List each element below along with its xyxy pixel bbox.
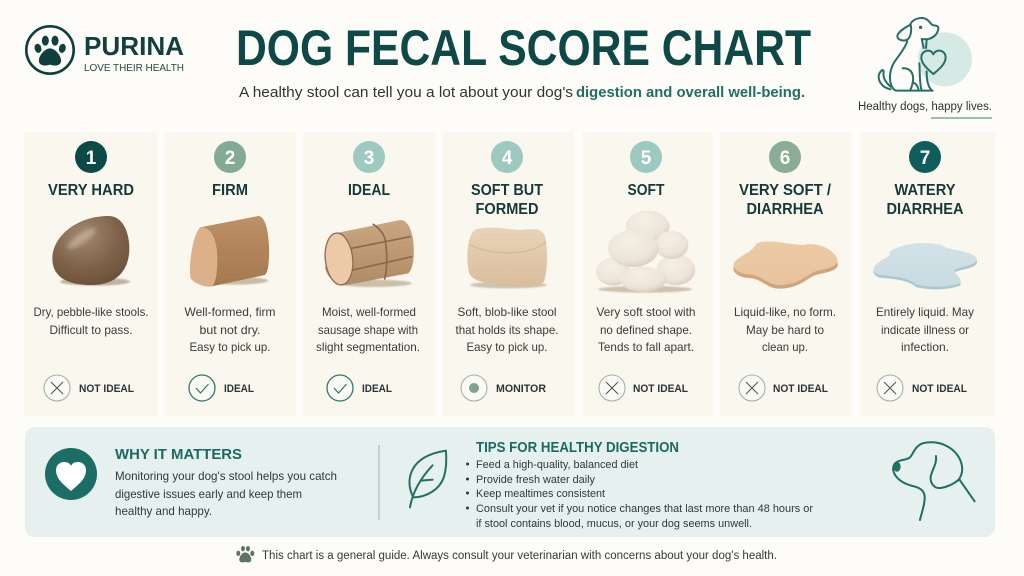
logo: Purina xyxy=(26,26,184,74)
heading: tips: TIPS FOR HEALTHY DIGESTION xyxy=(476,440,679,456)
description xyxy=(456,305,558,354)
panel: score 2 firm xyxy=(164,132,296,416)
stool: water puddle xyxy=(874,243,977,289)
description: Well-formed, firm xyxy=(184,305,276,319)
description: Entirely liquid. May xyxy=(876,305,974,319)
description: but not dry. xyxy=(200,323,260,337)
status: ideal xyxy=(189,375,254,401)
icon: leaf xyxy=(410,451,446,507)
badge 5 xyxy=(630,141,662,173)
list: tips: Consult your vet if you notice changes that last more than 48 hours or xyxy=(476,503,813,515)
subtitle: A healthy stool can tell you a lot about your dog's xyxy=(239,84,573,101)
icon: footer paw xyxy=(236,546,254,562)
description: no defined shape. xyxy=(600,323,692,337)
description: indicate illness or xyxy=(881,323,969,337)
panel: score 6 very soft xyxy=(720,132,852,416)
text: why it matters xyxy=(115,469,337,518)
badge 2 xyxy=(214,141,246,173)
heading: FIRM xyxy=(212,182,248,199)
description: slight segmentation. xyxy=(316,340,420,354)
status: monitor: MONITOR xyxy=(496,383,546,395)
status: not ideal: NOT IDEAL xyxy=(912,383,967,395)
heading: FORMED xyxy=(476,201,538,218)
list: tips xyxy=(466,459,813,530)
caption: healthy dogs: Healthy dogs, happy lives. xyxy=(858,101,992,113)
stool: segmented sausage xyxy=(323,220,414,287)
description: May be hard to xyxy=(746,323,824,337)
panel: bottom info band xyxy=(25,427,995,537)
icon: dog profile xyxy=(893,442,975,520)
heading: DIARRHEA xyxy=(886,201,964,218)
panel: score 3 ideal xyxy=(303,132,436,416)
description xyxy=(734,305,836,354)
title: DOG FECAL SCORE CHART xyxy=(236,20,811,76)
list: tips: Provide fresh water daily xyxy=(476,474,595,486)
description xyxy=(34,305,148,337)
list: tips: if stool contains blood, mucus, or your dog seems unwell. xyxy=(476,518,752,530)
heading: why it matters: WHY IT MATTERS xyxy=(115,446,242,463)
badge 2: 2 xyxy=(225,148,235,169)
description xyxy=(184,305,276,354)
description: sausage shape with xyxy=(318,323,418,337)
badge 3: 3 xyxy=(364,148,374,169)
text: why it matters: Monitoring your dog's stool helps you catch xyxy=(115,469,337,483)
panel: score 7 watery xyxy=(860,132,995,416)
description: clean up. xyxy=(762,340,808,354)
description xyxy=(596,305,696,354)
badge 1 xyxy=(75,141,107,173)
status: not ideal xyxy=(599,375,688,401)
icon: paw badge xyxy=(26,26,74,74)
status: not ideal xyxy=(877,375,967,401)
badge 7 xyxy=(909,141,941,173)
heading: WATERY xyxy=(894,182,956,199)
description: Soft, blob-like stool xyxy=(458,305,556,319)
icon: heart badge xyxy=(45,448,97,500)
status: not ideal: NOT IDEAL xyxy=(79,383,134,395)
stool: soft mound xyxy=(596,211,695,293)
icon: sitting dog with heart xyxy=(879,18,972,91)
heading xyxy=(886,182,964,218)
description: Moist, well-formed xyxy=(322,305,416,319)
description xyxy=(876,305,974,354)
stool: soft blob xyxy=(467,227,547,288)
description: Tends to fall apart. xyxy=(598,340,694,354)
badge 4: 4 xyxy=(502,148,513,169)
heading: SOFT xyxy=(628,182,665,199)
heading xyxy=(471,182,543,218)
status: ideal: IDEAL xyxy=(224,383,254,395)
badge 6 xyxy=(769,141,801,173)
status: not ideal xyxy=(44,375,134,401)
status: not ideal: NOT IDEAL xyxy=(633,383,688,395)
status: ideal: IDEAL xyxy=(362,383,392,395)
status: not ideal: NOT IDEAL xyxy=(773,383,828,395)
status: ideal xyxy=(327,375,392,401)
heading: VERY HARD xyxy=(48,182,134,199)
heading: SOFT BUT xyxy=(471,182,543,199)
text: why it matters: digestive issues early and keep them xyxy=(115,487,302,501)
heading: IDEAL xyxy=(348,182,390,199)
badge 1: 1 xyxy=(86,148,97,169)
badge 7: 7 xyxy=(920,148,930,169)
panel: score 4 soft but formed xyxy=(443,132,574,416)
subtitle: digestion and overall well-being. xyxy=(576,84,805,101)
brand name: PURINA xyxy=(84,31,184,61)
description: infection. xyxy=(901,340,949,354)
badge 6: 6 xyxy=(780,148,790,169)
heading: VERY SOFT / xyxy=(739,182,832,199)
panel: score 1 very hard xyxy=(24,132,157,416)
description: Easy to pick up. xyxy=(466,340,548,354)
description xyxy=(316,305,420,354)
description: Difficult to pass. xyxy=(50,323,132,337)
description: that holds its shape. xyxy=(456,323,558,337)
description: Very soft stool with xyxy=(596,305,696,319)
description: Easy to pick up. xyxy=(190,340,270,354)
text: why it matters: healthy and happy. xyxy=(115,504,212,518)
heading: DIARRHEA xyxy=(746,201,824,218)
panel: score 5 soft xyxy=(582,132,713,416)
heading xyxy=(739,182,832,218)
badge 3 xyxy=(353,141,385,173)
tagline: LOVE THEIR HEALTH xyxy=(84,63,184,74)
list: tips: Feed a high-quality, balanced diet xyxy=(476,459,638,471)
list: tips: Keep mealtimes consistent xyxy=(476,488,605,500)
stool: tan puddle xyxy=(733,241,838,289)
description: Dry, pebble-like stools. xyxy=(34,305,148,319)
stool: firm log xyxy=(190,216,269,287)
status: not ideal xyxy=(739,375,828,401)
footer text: This chart is a general guide. Always consult your veterinarian with concerns about your dog's health. xyxy=(262,550,777,562)
status: monitor xyxy=(461,375,546,401)
badge 4 xyxy=(491,141,523,173)
badge 5: 5 xyxy=(641,148,652,169)
description: Liquid-like, no form. xyxy=(734,305,836,319)
stool: pebble xyxy=(52,216,130,286)
footer note xyxy=(236,546,777,562)
